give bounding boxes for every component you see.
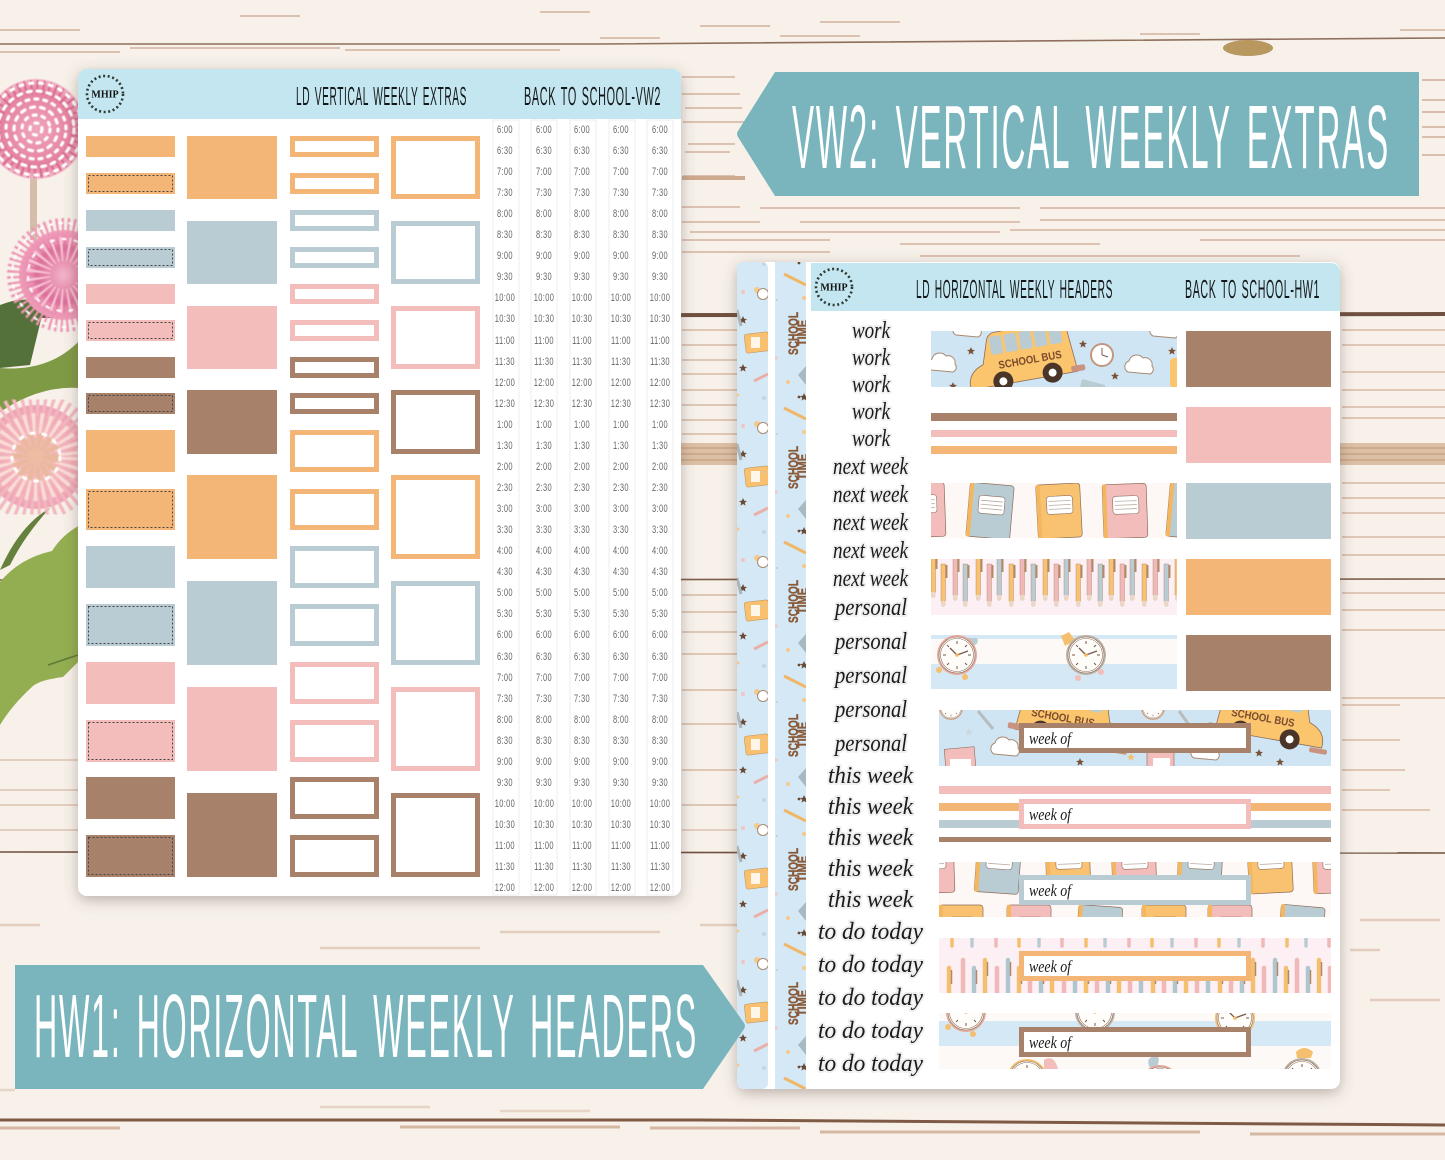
script word stickers: to do today [818, 985, 923, 1011]
time stickers: five columns, 6:00 to 12:00: 1:00 [613, 417, 629, 430]
time stickers: five columns, 6:00 to 12:00: 11:30 [572, 354, 592, 367]
time stickers: five columns, 6:00 to 12:00: 3:00 [536, 501, 552, 514]
time stickers: five columns, 6:00 to 12:00: 12:00 [650, 880, 670, 893]
week-of strip 1: school bus [939, 710, 1331, 766]
time stickers: five columns, 6:00 to 12:00: 10:00 [534, 290, 554, 303]
colour blocks beside the header strips [1186, 331, 1331, 691]
time stickers: five columns, 6:00 to 12:00: 10:00 [650, 796, 670, 809]
time stickers: five columns, 6:00 to 12:00: 8:00 [497, 206, 513, 219]
script word stickers: to do today [818, 1018, 923, 1044]
week-of box: blue: week of [1029, 881, 1073, 900]
time stickers: five columns, 6:00 to 12:00: 8:00 [536, 712, 552, 725]
time stickers: five columns, 6:00 to 12:00: 1:30 [536, 438, 552, 451]
time stickers: five columns, 6:00 to 12:00: 7:00 [536, 164, 552, 177]
time stickers: five columns, 6:00 to 12:00: 6:30 [652, 143, 668, 156]
script word stickers: this week [828, 887, 913, 913]
time stickers: five columns, 6:00 to 12:00: 6:30 [497, 649, 513, 662]
time stickers: five columns, 6:00 to 12:00: 12:00 [495, 375, 515, 388]
time stickers: five columns, 6:00 to 12:00: 8:00 [652, 206, 668, 219]
time stickers: five columns, 6:00 to 12:00: 5:30 [574, 606, 590, 619]
time stickers: five columns, 6:00 to 12:00: 3:30 [497, 522, 513, 535]
time stickers: five columns, 6:00 to 12:00: 7:30 [536, 185, 552, 198]
MHIP logo wreath: MHIP [820, 282, 848, 294]
time stickers: five columns, 6:00 to 12:00: 2:00 [536, 459, 552, 472]
time stickers: five columns, 6:00 to 12:00: 12:00 [534, 880, 554, 893]
time stickers: five columns, 6:00 to 12:00: 7:00 [613, 164, 629, 177]
time stickers: five columns, 6:00 to 12:00: 4:30 [497, 564, 513, 577]
time stickers: five columns, 6:00 to 12:00: 6:00 [574, 627, 590, 640]
week-of box: orange [1022, 954, 1248, 978]
time stickers: five columns, 6:00 to 12:00: 5:30 [497, 606, 513, 619]
time stickers: five columns, 6:00 to 12:00: 8:30 [497, 733, 513, 746]
time stickers: five columns, 6:00 to 12:00: 1:30 [652, 438, 668, 451]
time stickers: five columns, 6:00 to 12:00: 8:30 [652, 733, 668, 746]
time stickers: five columns, 6:00 to 12:00: 6:00 [497, 627, 513, 640]
MHIP logo wreath [87, 76, 123, 112]
time stickers: five columns, 6:00 to 12:00: 9:30 [652, 269, 668, 282]
time stickers: five columns, 6:00 to 12:00: 10:30 [534, 817, 554, 830]
time stickers: five columns, 6:00 to 12:00: 6:00 [536, 122, 552, 135]
time stickers: five columns, 6:00 to 12:00: 2:00 [574, 459, 590, 472]
time stickers: five columns, 6:00 to 12:00: 9:00 [497, 754, 513, 767]
washi strip 2: school time pattern: SCHOOL [785, 446, 801, 489]
time stickers: five columns, 6:00 to 12:00: 8:30 [536, 227, 552, 240]
time stickers: five columns, 6:00 to 12:00: 5:30 [536, 606, 552, 619]
script word stickers: next week [833, 454, 908, 480]
column 3: small outlined boxes [292, 138, 376, 874]
time stickers: five columns, 6:00 to 12:00: 6:30 [574, 143, 590, 156]
time stickers: five columns, 6:00 to 12:00: 8:00 [574, 712, 590, 725]
time stickers: five columns, 6:00 to 12:00: 8:00 [613, 206, 629, 219]
washi strip 2: school time pattern: TIME [794, 454, 810, 480]
script word stickers: this week [828, 825, 913, 851]
time stickers: five columns, 6:00 to 12:00: 9:30 [574, 269, 590, 282]
time stickers: five columns, 6:00 to 12:00: 6:30 [652, 649, 668, 662]
week-of strip 2: stripes [939, 786, 1331, 842]
time stickers: five columns, 6:00 to 12:00: 7:00 [497, 670, 513, 683]
time stickers: five columns, 6:00 to 12:00: 2:00 [497, 459, 513, 472]
header strip 4: pens [931, 555, 1182, 615]
time stickers: five columns, 6:00 to 12:00: 6:30 [536, 143, 552, 156]
time stickers: five columns, 6:00 to 12:00: 1:30 [613, 438, 629, 451]
time stickers: five columns, 6:00 to 12:00: 7:00 [574, 164, 590, 177]
time stickers: five columns, 6:00 to 12:00: 10:30 [611, 311, 631, 324]
time stickers: five columns, 6:00 to 12:00: 9:30 [497, 775, 513, 788]
time stickers: five columns, 6:00 to 12:00: 11:00 [495, 333, 515, 346]
time stickers: five columns, 6:00 to 12:00: 12:00 [534, 375, 554, 388]
washi strip 2: school time pattern: TIME [794, 722, 810, 748]
time stickers: five columns, 6:00 to 12:00: 7:00 [497, 164, 513, 177]
time stickers: five columns, 6:00 to 12:00: 10:30 [534, 311, 554, 324]
header strip 1: school bus [931, 331, 1177, 387]
time stickers: five columns, 6:00 to 12:00: 11:00 [572, 333, 592, 346]
time stickers: five columns, 6:00 to 12:00: 2:30 [652, 480, 668, 493]
time stickers: five columns, 6:00 to 12:00: 9:00 [574, 754, 590, 767]
time stickers: five columns, 6:00 to 12:00: 9:00 [613, 248, 629, 261]
time stickers: five columns, 6:00 to 12:00: 10:00 [611, 796, 631, 809]
time stickers: five columns, 6:00 to 12:00: 8:30 [497, 227, 513, 240]
time stickers: five columns, 6:00 to 12:00: 8:30 [536, 733, 552, 746]
header strip 3: notebooks [931, 483, 1177, 538]
script word stickers: next week [833, 566, 908, 592]
time stickers: five columns, 6:00 to 12:00: 4:00 [652, 543, 668, 556]
time stickers: five columns, 6:00 to 12:00: 12:00 [611, 880, 631, 893]
time stickers: five columns, 6:00 to 12:00: 6:30 [536, 649, 552, 662]
time stickers: five columns, 6:00 to 12:00: 9:30 [652, 775, 668, 788]
time stickers: five columns, 6:00 to 12:00: 11:00 [534, 838, 554, 851]
time stickers: five columns, 6:00 to 12:00: 12:00 [495, 880, 515, 893]
time stickers: five columns, 6:00 to 12:00: 6:30 [497, 143, 513, 156]
time stickers: five columns, 6:00 to 12:00: 12:30 [495, 396, 515, 409]
washi strip 2: school time pattern: TIME [794, 856, 810, 882]
time stickers: five columns, 6:00 to 12:00: 12:30 [572, 396, 592, 409]
time stickers: five columns, 6:00 to 12:00: 8:30 [574, 733, 590, 746]
time stickers: five columns, 6:00 to 12:00: 4:00 [536, 543, 552, 556]
time stickers: five columns, 6:00 to 12:00: 8:00 [652, 712, 668, 725]
time stickers: five columns, 6:00 to 12:00: 10:30 [495, 817, 515, 830]
time stickers: five columns, 6:00 to 12:00: 9:30 [574, 775, 590, 788]
time stickers: five columns, 6:00 to 12:00: 9:00 [652, 248, 668, 261]
banner: HW1 horizontal weekly headers, arrow pointing right [15, 965, 745, 1089]
time stickers: five columns, 6:00 to 12:00: 9:30 [536, 775, 552, 788]
script word stickers: next week [833, 482, 908, 508]
time stickers: five columns, 6:00 to 12:00: 4:30 [613, 564, 629, 577]
week-of box: brown lower: week of [1029, 1033, 1073, 1052]
time stickers: five columns, 6:00 to 12:00: 5:00 [652, 585, 668, 598]
time stickers: five columns, 6:00 to 12:00: 3:00 [652, 501, 668, 514]
time stickers: five columns, 6:00 to 12:00: 11:30 [572, 859, 592, 872]
time stickers: five columns, 6:00 to 12:00: 11:00 [572, 838, 592, 851]
column 4: large outlined boxes [394, 138, 478, 874]
time stickers: five columns, 6:00 to 12:00: 12:00 [572, 880, 592, 893]
time stickers: five columns, 6:00 to 12:00: 3:30 [652, 522, 668, 535]
washi strip 2: school time pattern: TIME [794, 588, 810, 614]
time stickers: five columns, 6:00 to 12:00: 11:30 [495, 354, 515, 367]
script word stickers: to do today [818, 1051, 923, 1077]
time stickers: five columns, 6:00 to 12:00: 6:30 [574, 649, 590, 662]
time stickers: five columns, 6:00 to 12:00: 8:00 [613, 712, 629, 725]
time stickers: five columns, 6:00 to 12:00: 8:00 [574, 206, 590, 219]
script word stickers: work [852, 426, 890, 452]
time stickers: five columns, 6:00 to 12:00: 12:30 [611, 396, 631, 409]
time stickers: five columns, 6:00 to 12:00: 10:30 [611, 817, 631, 830]
script word stickers: personal [833, 595, 907, 621]
time stickers: five columns, 6:00 to 12:00: 11:30 [611, 354, 631, 367]
time stickers: five columns, 6:00 to 12:00: 11:00 [495, 838, 515, 851]
time stickers: five columns, 6:00 to 12:00 [495, 122, 670, 893]
panel: VW2 vertical weekly extras sheet [78, 69, 681, 896]
sheet header bar [78, 69, 681, 119]
week-of box: orange: week of [1029, 957, 1073, 976]
header strip 2: stripes [931, 413, 1177, 454]
time stickers: five columns, 6:00 to 12:00: 10:30 [572, 817, 592, 830]
time stickers: five columns, 6:00 to 12:00: 2:00 [652, 459, 668, 472]
time stickers: five columns, 6:00 to 12:00: 4:00 [613, 543, 629, 556]
column 1: small solid and dashed boxes [86, 136, 175, 877]
time stickers: five columns, 6:00 to 12:00: 5:00 [497, 585, 513, 598]
time stickers: five columns, 6:00 to 12:00: 6:00 [613, 627, 629, 640]
week-of strip 1: school bus: SCHOOL BUS [1230, 707, 1295, 730]
script word stickers: this week [828, 856, 913, 882]
script word stickers: personal [833, 663, 907, 689]
week-of box: brown: week of [1029, 729, 1073, 748]
column 2: large solid blocks [187, 136, 277, 877]
time stickers: five columns, 6:00 to 12:00: 4:00 [497, 543, 513, 556]
time stickers: five columns, 6:00 to 12:00: 11:00 [611, 333, 631, 346]
time stickers: five columns, 6:00 to 12:00: 11:30 [650, 859, 670, 872]
time stickers: five columns, 6:00 to 12:00: 11:30 [650, 354, 670, 367]
time stickers: five columns, 6:00 to 12:00: 7:30 [574, 185, 590, 198]
week-of box: pink: week of [1029, 805, 1073, 824]
time strip outlines [493, 120, 673, 895]
time stickers: five columns, 6:00 to 12:00: 7:00 [536, 670, 552, 683]
script word stickers: personal [833, 629, 907, 655]
time stickers: five columns, 6:00 to 12:00: 5:30 [652, 606, 668, 619]
panel: HW1 horizontal weekly headers sheet [728, 257, 1349, 1102]
time stickers: five columns, 6:00 to 12:00: 10:30 [650, 311, 670, 324]
script word stickers: work [852, 318, 890, 344]
panel: VW2 vertical weekly extras sheet: LD VERTICAL WEEKLY EXTRAS [296, 81, 467, 111]
time stickers: five columns, 6:00 to 12:00: 9:00 [652, 754, 668, 767]
time stickers: five columns, 6:00 to 12:00: 11:00 [534, 333, 554, 346]
time stickers: five columns, 6:00 to 12:00: 4:30 [574, 564, 590, 577]
time stickers: five columns, 6:00 to 12:00: 2:30 [497, 480, 513, 493]
time stickers: five columns, 6:00 to 12:00: 10:00 [572, 796, 592, 809]
time stickers: five columns, 6:00 to 12:00: 10:00 [495, 796, 515, 809]
time stickers: five columns, 6:00 to 12:00: 6:00 [536, 627, 552, 640]
time stickers: five columns, 6:00 to 12:00: 12:30 [534, 396, 554, 409]
sheet header bar [811, 263, 1340, 311]
time stickers: five columns, 6:00 to 12:00: 7:30 [536, 691, 552, 704]
script word stickers: next week [833, 538, 908, 564]
washi strip 2: school time pattern: SCHOOL [785, 312, 801, 355]
time stickers: five columns, 6:00 to 12:00: 3:30 [613, 522, 629, 535]
washi strip 2: school time pattern: TIME [794, 990, 810, 1016]
time stickers: five columns, 6:00 to 12:00: 8:30 [652, 227, 668, 240]
time stickers: five columns, 6:00 to 12:00: 7:00 [574, 670, 590, 683]
week-of strip 3: notebooks [939, 862, 1331, 917]
time stickers: five columns, 6:00 to 12:00: 6:00 [574, 122, 590, 135]
time stickers: five columns, 6:00 to 12:00: 12:00 [650, 375, 670, 388]
week-of strip 5: alarm clocks [939, 1013, 1331, 1069]
time stickers: five columns, 6:00 to 12:00: 3:00 [613, 501, 629, 514]
time stickers: five columns, 6:00 to 12:00: 12:00 [572, 375, 592, 388]
header strip 1: school bus: SCHOOL BUS [998, 349, 1063, 372]
time stickers: five columns, 6:00 to 12:00: 3:30 [536, 522, 552, 535]
time stickers: five columns, 6:00 to 12:00: 7:30 [613, 691, 629, 704]
time stickers: five columns, 6:00 to 12:00: 3:00 [574, 501, 590, 514]
time stickers: five columns, 6:00 to 12:00: 8:30 [574, 227, 590, 240]
time stickers: five columns, 6:00 to 12:00: 8:30 [613, 227, 629, 240]
time stickers: five columns, 6:00 to 12:00: 1:00 [497, 417, 513, 430]
header strip 5: alarm clocks [931, 632, 1177, 689]
time stickers: five columns, 6:00 to 12:00: 9:30 [613, 269, 629, 282]
flowers and leaves on the left edge [0, 79, 116, 725]
time stickers: five columns, 6:00 to 12:00: 9:00 [613, 754, 629, 767]
time stickers: five columns, 6:00 to 12:00: 4:30 [536, 564, 552, 577]
time stickers: five columns, 6:00 to 12:00: 7:30 [613, 185, 629, 198]
time stickers: five columns, 6:00 to 12:00: 7:30 [497, 691, 513, 704]
time stickers: five columns, 6:00 to 12:00: 2:30 [536, 480, 552, 493]
time stickers: five columns, 6:00 to 12:00: 10:00 [534, 796, 554, 809]
week-of strip 1: school bus: SCHOOL BUS [1030, 707, 1095, 730]
time stickers: five columns, 6:00 to 12:00: 5:30 [613, 606, 629, 619]
time stickers: five columns, 6:00 to 12:00: 10:30 [495, 311, 515, 324]
time stickers: five columns, 6:00 to 12:00: 6:00 [497, 122, 513, 135]
time stickers: five columns, 6:00 to 12:00: 6:30 [613, 143, 629, 156]
time stickers: five columns, 6:00 to 12:00: 1:30 [574, 438, 590, 451]
time stickers: five columns, 6:00 to 12:00: 9:00 [536, 754, 552, 767]
week-of box: blue [1022, 878, 1248, 902]
script word stickers: work [852, 345, 890, 371]
week-of box: pink [1022, 802, 1248, 826]
time stickers: five columns, 6:00 to 12:00: 9:00 [536, 248, 552, 261]
washi strip 2: school time pattern: SCHOOL [785, 848, 801, 891]
panel: HW1 horizontal weekly headers sheet: LD HORIZONTAL WEEKLY HEADERS [916, 274, 1113, 304]
washi strip 2: school time pattern: SCHOOL [785, 714, 801, 757]
script word stickers: to do today [818, 919, 923, 945]
time stickers: five columns, 6:00 to 12:00: 11:30 [534, 354, 554, 367]
washi strip 2: school time pattern: SCHOOL [785, 982, 801, 1025]
time stickers: five columns, 6:00 to 12:00: 4:30 [652, 564, 668, 577]
script word stickers: personal [833, 697, 907, 723]
time stickers: five columns, 6:00 to 12:00: 10:30 [650, 817, 670, 830]
washi strip 1: school pattern [737, 262, 768, 1089]
script word stickers: work [852, 372, 890, 398]
time stickers: five columns, 6:00 to 12:00: 9:30 [536, 269, 552, 282]
time stickers: five columns, 6:00 to 12:00: 2:30 [574, 480, 590, 493]
time stickers: five columns, 6:00 to 12:00: 6:00 [652, 122, 668, 135]
time stickers: five columns, 6:00 to 12:00: 1:00 [574, 417, 590, 430]
script word stickers [818, 318, 923, 1077]
script word stickers: personal [833, 731, 907, 757]
time stickers: five columns, 6:00 to 12:00: 10:00 [495, 290, 515, 303]
time stickers: five columns, 6:00 to 12:00: 7:30 [652, 185, 668, 198]
MHIP logo wreath [816, 269, 852, 305]
washi strip 2: school time pattern [775, 262, 806, 1089]
time stickers: five columns, 6:00 to 12:00: 11:30 [534, 859, 554, 872]
time stickers: five columns, 6:00 to 12:00: 7:30 [574, 691, 590, 704]
time stickers: five columns, 6:00 to 12:00: 6:30 [613, 649, 629, 662]
week-of box: brown lower [1022, 1030, 1248, 1054]
time stickers: five columns, 6:00 to 12:00: 7:30 [652, 691, 668, 704]
time stickers: five columns, 6:00 to 12:00: 2:30 [613, 480, 629, 493]
time stickers: five columns, 6:00 to 12:00: 1:00 [536, 417, 552, 430]
week-of box: brown [1022, 726, 1248, 750]
washi strip 2: school time pattern: SCHOOL [785, 580, 801, 623]
washi strip 2: school time pattern: TIME [794, 320, 810, 346]
time stickers: five columns, 6:00 to 12:00: 8:30 [613, 733, 629, 746]
script word stickers: next week [833, 510, 908, 536]
time stickers: five columns, 6:00 to 12:00: 6:00 [613, 122, 629, 135]
time stickers: five columns, 6:00 to 12:00: 5:00 [613, 585, 629, 598]
time stickers: five columns, 6:00 to 12:00: 7:00 [652, 670, 668, 683]
text: BACK TO SCHOOL-VW2 [524, 81, 661, 111]
time stickers: five columns, 6:00 to 12:00: 7:00 [652, 164, 668, 177]
time stickers: five columns, 6:00 to 12:00: 6:00 [652, 627, 668, 640]
script word stickers: this week [828, 794, 913, 820]
time stickers: five columns, 6:00 to 12:00: 3:30 [574, 522, 590, 535]
time stickers: five columns, 6:00 to 12:00: 10:00 [650, 290, 670, 303]
time stickers: five columns, 6:00 to 12:00: 11:00 [611, 838, 631, 851]
time stickers: five columns, 6:00 to 12:00: 8:00 [536, 206, 552, 219]
time stickers: five columns, 6:00 to 12:00: 11:30 [495, 859, 515, 872]
week-of strip 4: pens [939, 938, 1331, 998]
time stickers: five columns, 6:00 to 12:00: 8:00 [497, 712, 513, 725]
time stickers: five columns, 6:00 to 12:00: 10:30 [572, 311, 592, 324]
time stickers: five columns, 6:00 to 12:00: 10:00 [572, 290, 592, 303]
time stickers: five columns, 6:00 to 12:00: 11:30 [611, 859, 631, 872]
time stickers: five columns, 6:00 to 12:00: 5:00 [574, 585, 590, 598]
time stickers: five columns, 6:00 to 12:00: 12:30 [650, 396, 670, 409]
script word stickers: to do today [818, 952, 923, 978]
time stickers: five columns, 6:00 to 12:00: 1:00 [652, 417, 668, 430]
time stickers: five columns, 6:00 to 12:00: 10:00 [611, 290, 631, 303]
time stickers: five columns, 6:00 to 12:00: 5:00 [536, 585, 552, 598]
time stickers: five columns, 6:00 to 12:00: 3:00 [497, 501, 513, 514]
script word stickers: work [852, 399, 890, 425]
time stickers: five columns, 6:00 to 12:00: 1:30 [497, 438, 513, 451]
MHIP logo wreath: MHIP [91, 90, 119, 100]
script word stickers: this week [828, 763, 913, 789]
time stickers: five columns, 6:00 to 12:00: 7:00 [613, 670, 629, 683]
time stickers: five columns, 6:00 to 12:00: 12:00 [611, 375, 631, 388]
time stickers: five columns, 6:00 to 12:00: 9:00 [574, 248, 590, 261]
time stickers: five columns, 6:00 to 12:00: 4:00 [574, 543, 590, 556]
time stickers: five columns, 6:00 to 12:00: 2:00 [613, 459, 629, 472]
time stickers: five columns, 6:00 to 12:00: 9:30 [613, 775, 629, 788]
time stickers: five columns, 6:00 to 12:00: 11:00 [650, 333, 670, 346]
time stickers: five columns, 6:00 to 12:00: 7:30 [497, 185, 513, 198]
time stickers: five columns, 6:00 to 12:00: 11:00 [650, 838, 670, 851]
time stickers: five columns, 6:00 to 12:00: 9:30 [497, 269, 513, 282]
time stickers: five columns, 6:00 to 12:00: 9:00 [497, 248, 513, 261]
